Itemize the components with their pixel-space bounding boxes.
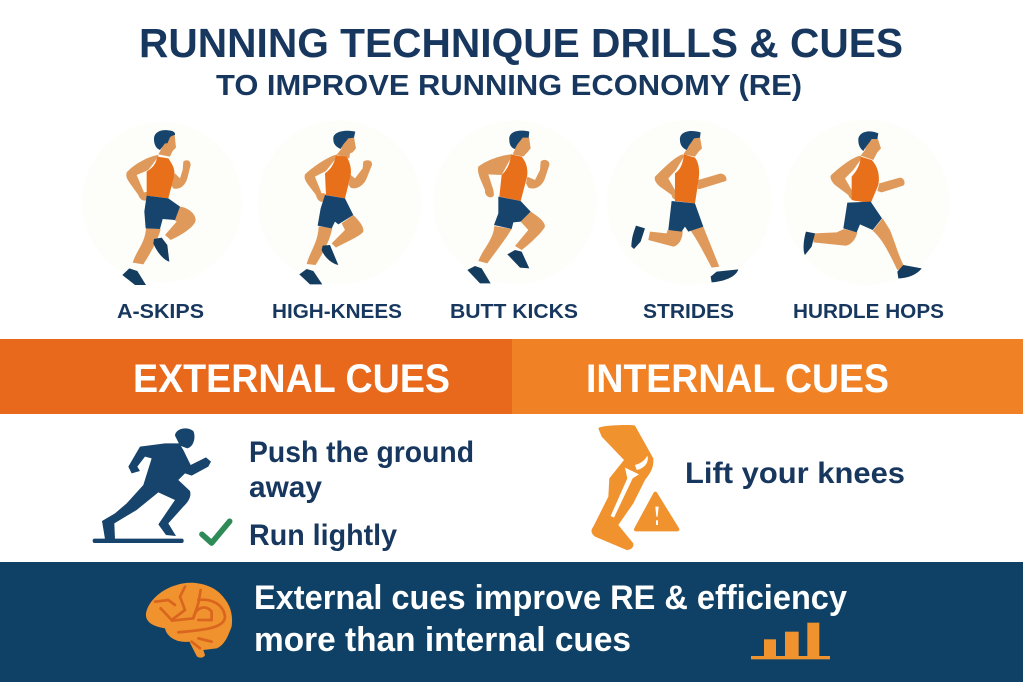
drill: hurdle hops xyxy=(784,120,949,323)
icon: bar chart xyxy=(751,623,830,659)
icon: sprinter on ground xyxy=(93,428,211,543)
drill: butt kicks: BUTT KICKS xyxy=(450,301,578,323)
text: internal cue example: Lift your knees xyxy=(685,457,905,490)
icon: brain xyxy=(146,583,232,658)
drill: strides xyxy=(607,120,772,323)
header band: external cues: EXTERNAL CUES xyxy=(133,357,450,401)
header band: external cues xyxy=(0,339,512,414)
text: external cue examples: away xyxy=(249,471,322,504)
text: external cue examples xyxy=(249,436,474,552)
text: conclusion: External cues improve RE & efficiency xyxy=(254,579,847,617)
title: TO IMPROVE RUNNING ECONOMY (RE) xyxy=(216,70,802,102)
drill: butt kicks xyxy=(433,121,597,323)
text: external cue examples: Run lightly xyxy=(249,519,397,552)
drill: high-knees xyxy=(258,121,421,323)
icon: knee with bones xyxy=(592,425,653,550)
text: external cue examples: Push the ground xyxy=(249,436,474,469)
panel: conclusion band xyxy=(0,562,1023,682)
icon: green check xyxy=(202,521,230,543)
title: RUNNING TECHNIQUE DRILLS & CUES xyxy=(139,20,903,66)
text: conclusion: more than internal cues xyxy=(254,621,631,659)
drill: hurdle hops: HURDLE HOPS xyxy=(793,301,944,323)
panel: drills row xyxy=(82,120,949,323)
drill: high-knees: HIGH-KNEES xyxy=(272,301,402,323)
title xyxy=(139,20,903,102)
text: conclusion xyxy=(254,579,847,659)
drill: A-skips xyxy=(82,122,242,323)
header band: internal cues xyxy=(512,339,1023,414)
drill: A-skips: A-SKIPS xyxy=(117,301,204,323)
icon: warning triangle xyxy=(636,494,677,529)
header band: internal cues: INTERNAL CUES xyxy=(586,357,889,401)
drill: strides: STRIDES xyxy=(643,301,734,323)
